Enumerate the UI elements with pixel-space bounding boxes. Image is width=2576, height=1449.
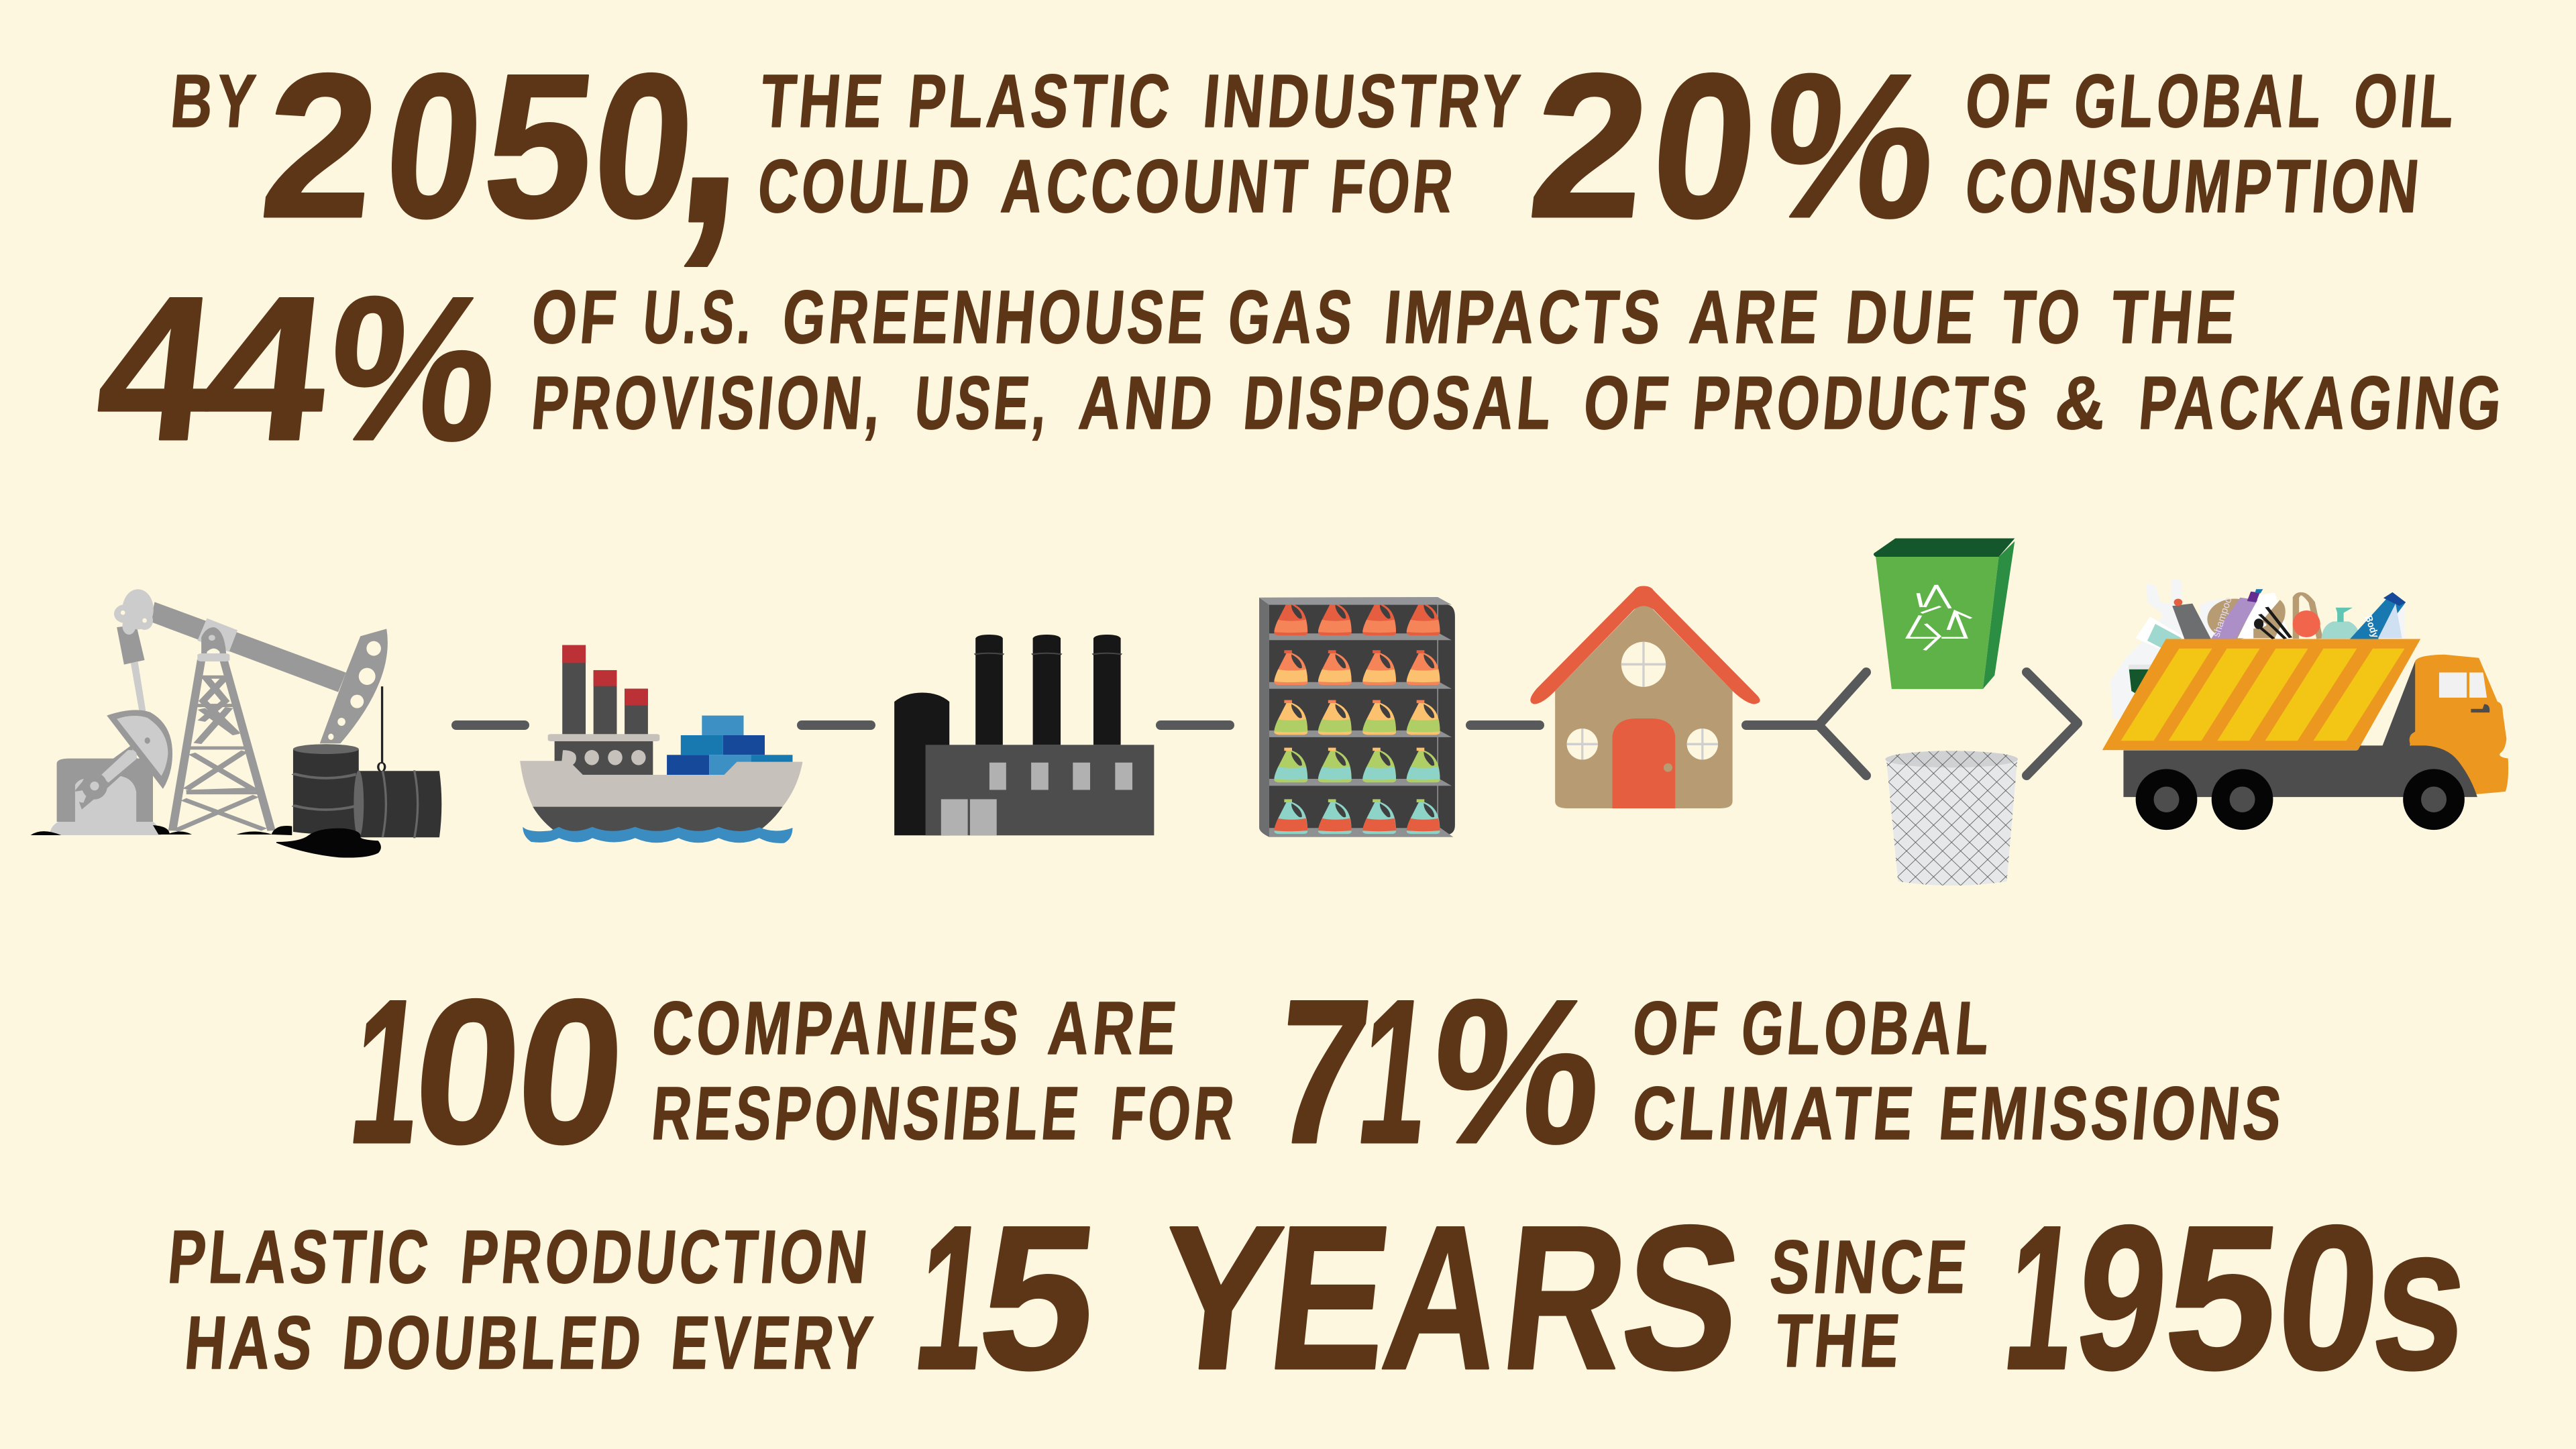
big text: 1950s (1996, 1183, 2479, 1413)
text: greenhouse gas line: THE (2108, 274, 2243, 359)
text: the plastic industry: INDUSTRY (1200, 58, 1527, 143)
text: responsible for: FOR (1108, 1071, 1241, 1155)
text: consumption: CONSUMPTION (1962, 144, 2426, 228)
text: greenhouse gas line: DUE (1843, 274, 1982, 359)
connector dash 2 (797, 720, 875, 730)
big number: 100: 1 (341, 957, 433, 1187)
text: of global oil: OIL (2351, 58, 2461, 143)
big text: 15 years: S (1612, 1183, 1752, 1413)
text: greenhouse gas line (529, 274, 2243, 359)
big number: 20% (1521, 32, 1947, 261)
big text: 1950s: s (2363, 1183, 2479, 1413)
big text: 15 years (906, 1183, 1752, 1413)
text: of global: GLOBAL (1738, 985, 1996, 1070)
big number: 71%: % (1420, 957, 1613, 1187)
big number: 44% (88, 254, 509, 484)
text: provision line: DISPOSAL (1240, 360, 1558, 445)
text: of global (1629, 985, 1996, 1070)
text: could account for: ACCOUNT (998, 144, 1314, 228)
connector dash 1 (451, 720, 529, 730)
text: companies are: ARE (1045, 985, 1183, 1070)
text: the plastic industry (757, 58, 1527, 143)
big text: 1950s: 1 (1996, 1183, 2087, 1413)
headline: 44 percent stat (88, 254, 2508, 484)
text: of global: OF (1629, 985, 1725, 1070)
text: has doubled every: HAS (182, 1300, 319, 1385)
text: greenhouse gas line: GAS (1225, 274, 1359, 359)
text: has doubled every: EVERY (668, 1300, 879, 1385)
big number: 44%: 4 (88, 254, 227, 484)
text: could account for: COULD (755, 144, 977, 228)
text: climate emissions (1629, 1071, 2288, 1155)
text: plastic production: PRODUCTION (458, 1214, 874, 1299)
text: responsible for: RESPONSIBLE (649, 1071, 1085, 1155)
big number: 71% (1265, 957, 1613, 1187)
text: the plastic industry: THE (757, 58, 890, 143)
big number: 2050: 5 (474, 32, 606, 261)
text: greenhouse gas line: IMPACTS (1381, 274, 1668, 359)
connector dash 4 (1466, 720, 1544, 730)
headline: by 2050 plastic stat (168, 0, 2461, 282)
text: greenhouse gas line: OF (529, 274, 623, 359)
text: could account for (755, 144, 1460, 228)
icon: factory (894, 635, 1154, 835)
text: of global oil: GLOBAL (2071, 58, 2328, 143)
text: since: SINCE (1767, 1224, 1974, 1309)
connector dash 3 (1156, 720, 1234, 730)
big number: 20%: 0 (1642, 32, 1768, 261)
text: provision line: AND (1076, 360, 1220, 445)
big text: 15 years: R (1493, 1183, 1638, 1413)
text: greenhouse gas line: GREENHOUSE (780, 274, 1212, 359)
big number: 71%: 1 (1349, 957, 1440, 1187)
label on body wash bottle: Body Wash (2362, 614, 2390, 664)
big number: 44%: % (317, 254, 509, 484)
icon: store shelf with plastic bottles (1259, 597, 1455, 837)
big number: 20%: % (1753, 32, 1947, 261)
text: provision line: & (2052, 360, 2114, 445)
big text: 15 years: A (1374, 1183, 1512, 1413)
text: has doubled every (182, 1300, 879, 1385)
text: provision line: OF (1580, 360, 1676, 445)
big number: 100 (341, 957, 635, 1187)
icon: oil pump jack and barrels (31, 589, 441, 858)
big text: 15 years: E (1259, 1183, 1401, 1413)
big number: 2050: 2 (253, 32, 388, 261)
big text: 15 years: 5 (969, 1183, 1108, 1413)
statement: 100 companies (341, 957, 2288, 1187)
text: could account for: FOR (1328, 144, 1460, 228)
truck body (2102, 639, 2508, 830)
statement: plastic production doubling (165, 1183, 2479, 1413)
connector: dash and fork to bins (1746, 672, 1866, 775)
icon: cargo ship (520, 645, 802, 843)
text: of global oil: OF (1962, 58, 2057, 143)
icon: house (1530, 586, 1760, 808)
big text: 1950s: 9 (2065, 1183, 2178, 1413)
text: provision line: PRODUCTS (1690, 360, 2035, 445)
big number: 20%: 2 (1521, 32, 1659, 261)
big number: 71%: 7 (1265, 957, 1379, 1187)
text: climate emissions: EMISSIONS (1936, 1071, 2288, 1155)
big number: 100: 0 (404, 957, 532, 1187)
big text: 15 years: 1 (906, 1183, 998, 1413)
big text: 15 years: Y (1148, 1183, 1291, 1413)
text: greenhouse gas line: ARE (1686, 274, 1825, 359)
text: provision line: PROVISION, (529, 360, 888, 445)
big number: 44%: 4 (194, 254, 340, 484)
text: companies are: COMPANIES (649, 985, 1026, 1070)
text: greenhouse gas line: TO (1998, 274, 2087, 359)
big number: 2050: 0 (583, 32, 704, 261)
text: the: THE (1772, 1298, 1907, 1383)
text: greenhouse gas line: U.S. (640, 274, 759, 359)
label on shampoo bottle: shampoo (2210, 596, 2235, 639)
text: the plastic industry: PLASTIC (905, 58, 1177, 143)
text: provision line: USE, (912, 360, 1054, 445)
text: plastic production: PLASTIC (165, 1214, 435, 1299)
icon: green recycling bin (1874, 538, 2015, 689)
text: climate emissions: CLIMATE (1629, 1071, 1921, 1155)
big text: 1950s: 0 (2267, 1183, 2390, 1413)
big text: 1950s: 5 (2155, 1183, 2290, 1413)
text: has doubled every: DOUBLED (339, 1300, 648, 1385)
icon: mesh waste basket (1885, 751, 2018, 885)
text: plastic production (165, 1214, 874, 1299)
waste: bag and packaging (2110, 578, 2406, 720)
label: by: BY (168, 58, 262, 143)
big number: 100: 0 (506, 957, 635, 1187)
icon: dump truck full of plastic waste (2102, 578, 2508, 830)
text: provision line (529, 360, 2508, 445)
big number: 2050: 0 (375, 32, 493, 261)
big number: 2050 (253, 0, 763, 282)
arrow: chevron from bins to truck (2027, 672, 2078, 775)
